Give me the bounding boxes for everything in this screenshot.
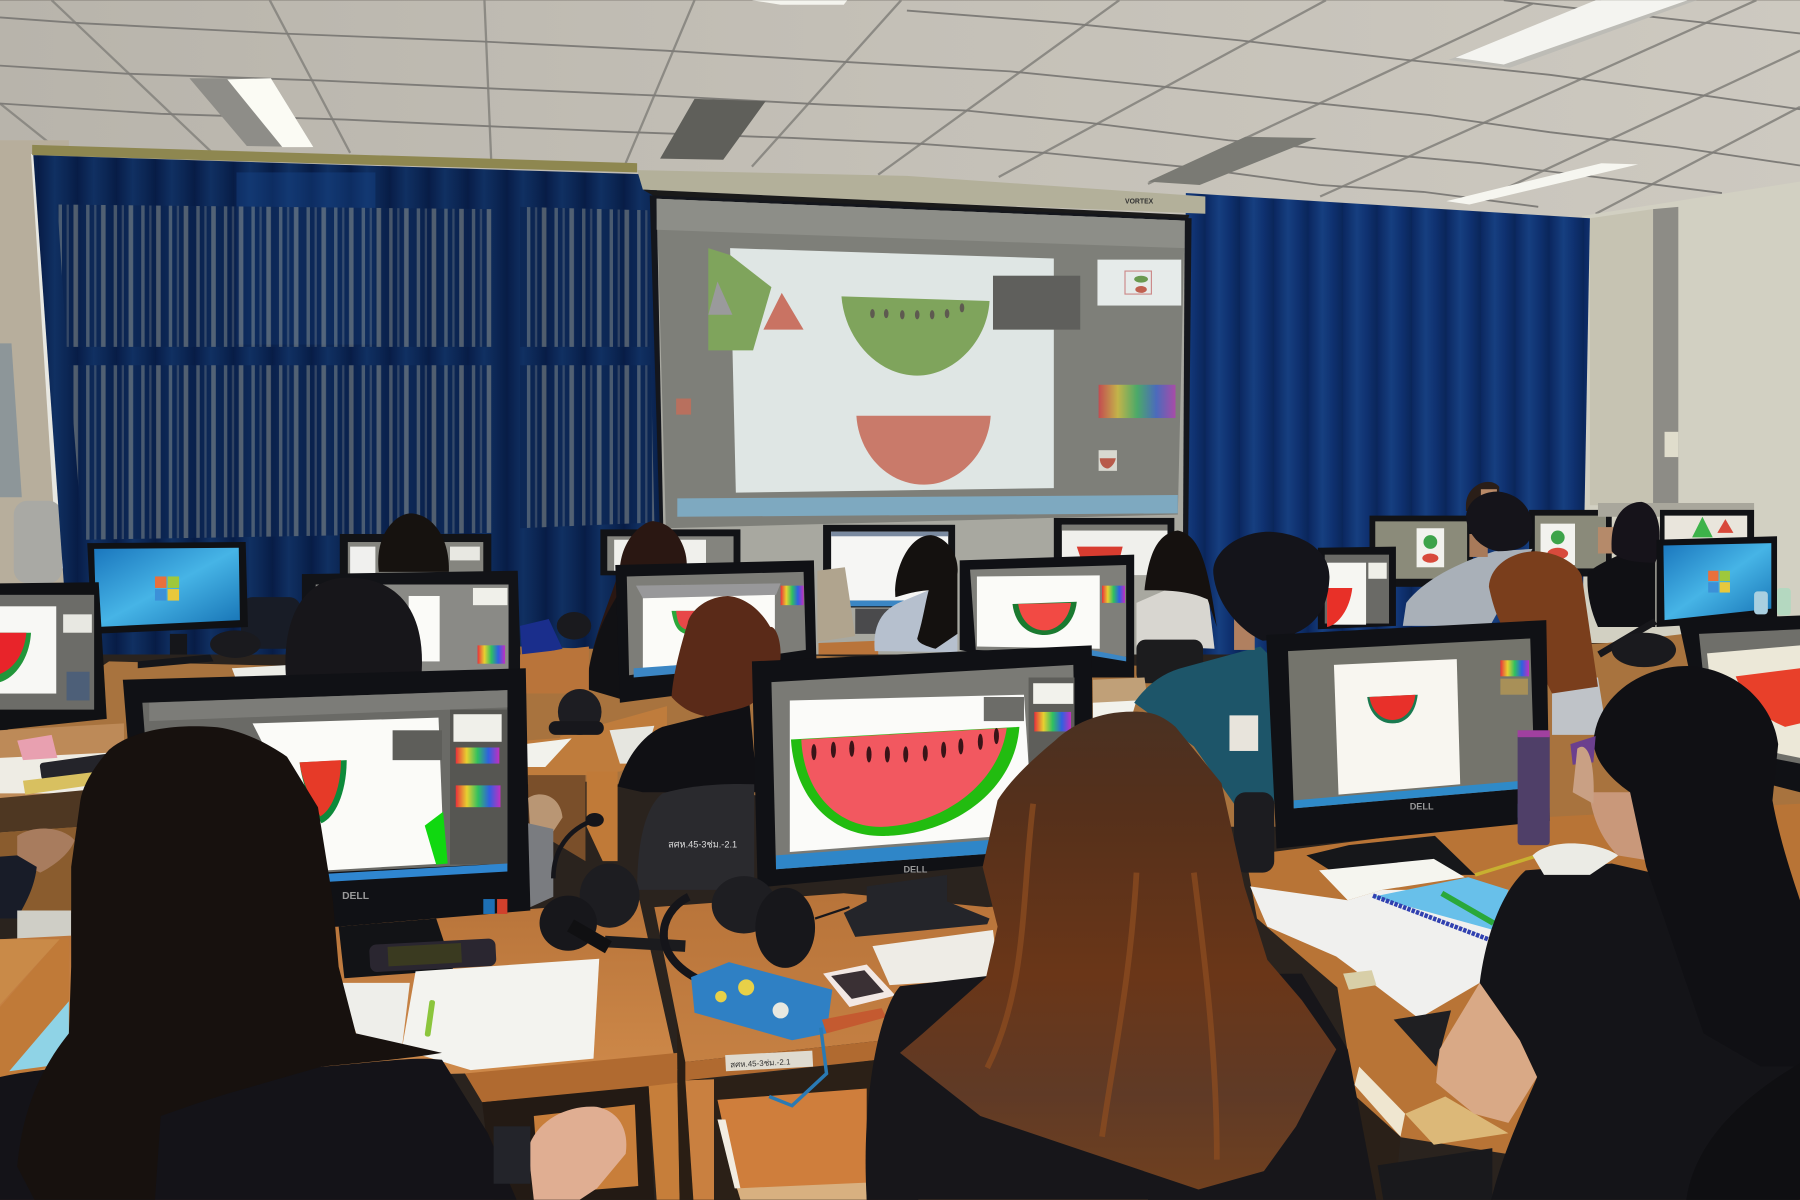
person: man with black hair and teal shirt — [1134, 532, 1329, 804]
right wall and pillar — [1582, 182, 1800, 643]
panels — [984, 697, 1024, 721]
headset: middle — [549, 689, 604, 735]
hand and mic by left monitor — [528, 794, 604, 907]
back row monitors — [87, 503, 1754, 677]
headphones: left pair — [540, 863, 685, 951]
monitor: back row 7 — [1660, 510, 1754, 544]
person: woman with brown hair and black jacket — [618, 596, 781, 792]
projection screen — [650, 195, 1192, 655]
stand — [1306, 836, 1475, 875]
red triangle — [763, 293, 804, 330]
chair beside lace-shirt woman — [1136, 640, 1203, 683]
small items by pouch — [822, 1008, 886, 1033]
projector screen housing: VORTEX — [1125, 198, 1154, 205]
headphones: right pair — [664, 876, 849, 983]
neck — [1589, 792, 1653, 861]
phone on left desk — [369, 938, 497, 972]
teal sheet at left — [9, 1001, 69, 1071]
canvas — [730, 248, 1054, 493]
monitor: mid row center left — [615, 560, 817, 703]
water bottles — [1754, 588, 1791, 615]
taskbar — [327, 863, 507, 882]
left curtain — [33, 155, 664, 655]
right curtain — [1182, 193, 1590, 655]
headset on right desk — [1599, 621, 1676, 667]
hair — [1594, 666, 1800, 1067]
person: man in grey shirt — [1403, 492, 1533, 626]
monitor: large center: DELL — [903, 865, 928, 875]
monitor: large center — [752, 645, 1094, 937]
clothing — [866, 974, 1376, 1200]
floor — [17, 911, 71, 939]
monitor: back row 1 — [340, 534, 491, 581]
dark chair beside teal shirt — [1234, 792, 1274, 873]
swatches — [1099, 385, 1176, 418]
person: back row woman center — [587, 521, 687, 700]
middle desks: left of jacket — [525, 706, 667, 861]
tablet — [610, 726, 654, 764]
float panel — [393, 730, 442, 760]
yellow pen — [1475, 855, 1538, 875]
watermelon slice — [300, 760, 347, 823]
printer behind — [1598, 503, 1754, 517]
sheer window panels — [57, 205, 491, 347]
white smartphone — [823, 964, 895, 1007]
glasses — [1570, 736, 1596, 765]
bag and headset at mid desk — [520, 612, 591, 694]
monitor: large right — [1266, 620, 1550, 875]
ceiling lights and vents — [189, 0, 1697, 205]
cheek — [1573, 747, 1594, 804]
gap between desks — [675, 907, 714, 1200]
desk label: สศห.45-3ช่ม.-2.1 — [730, 1057, 791, 1070]
monitor: right mid — [1318, 547, 1396, 629]
fan — [14, 501, 62, 583]
monitor: large right: DELL — [1410, 802, 1434, 812]
stand — [339, 919, 453, 978]
papers and notebook on right desk — [1250, 855, 1538, 1018]
papers on center desk — [872, 930, 999, 985]
person: auburn haired woman in pale top — [1489, 551, 1607, 735]
person: woman in lace shirt — [1136, 531, 1217, 649]
desk mess near teal shirt — [1093, 677, 1148, 723]
person: foreground center woman — [866, 712, 1376, 1200]
monitor: back row 6 — [1529, 510, 1612, 576]
chair behind blue monitor — [241, 597, 301, 649]
monitor: back row 5 — [1370, 516, 1473, 587]
hand — [17, 829, 75, 873]
stand — [844, 875, 990, 937]
monitor: blue desktop right — [1657, 536, 1777, 627]
foreground desk: center — [654, 893, 1148, 1200]
beige bag — [817, 567, 855, 642]
headset: left rear — [210, 630, 261, 658]
fill swatch — [676, 399, 691, 415]
monitor: back row 4 — [1054, 518, 1174, 575]
monitor: far left — [0, 582, 107, 730]
arm — [1436, 983, 1537, 1123]
clothing — [0, 1059, 517, 1200]
person: foreground left woman — [0, 726, 626, 1200]
back row desks — [0, 620, 1800, 827]
monitor: far right — [1678, 615, 1800, 792]
hand — [528, 1107, 626, 1200]
white cloth — [1533, 843, 1619, 875]
person: woman in black lace at right — [1587, 502, 1660, 627]
curtain rail — [32, 145, 637, 172]
projector screen housing — [637, 170, 1205, 223]
monitor: blue desktop left — [87, 542, 248, 668]
left desk surface with phone and items — [0, 723, 126, 939]
person: back row woman left — [378, 513, 449, 572]
desk label — [725, 1051, 813, 1071]
keyboard and desk edge right — [1343, 1010, 1508, 1200]
watermelon — [791, 727, 1019, 836]
paper — [525, 738, 572, 767]
label below notebook — [1343, 970, 1376, 990]
green polygon shape — [708, 248, 771, 350]
desk under bag — [818, 641, 878, 655]
paper: left rear — [232, 665, 290, 677]
strands — [987, 804, 1217, 1160]
lanyard — [769, 1028, 827, 1106]
office chair: สศห.45-3ช่ม.-2.1 — [668, 839, 737, 849]
taskbar — [677, 495, 1178, 517]
red slice — [856, 416, 991, 485]
monitor: mid row left — [302, 571, 521, 680]
right panel — [450, 710, 507, 865]
green slice — [841, 296, 990, 376]
office chair — [637, 784, 754, 890]
monitor: back row 2 — [600, 529, 740, 575]
person: man with black hair, mid left — [285, 578, 422, 677]
monitor: back row 3 — [823, 525, 955, 634]
foreground desk: left — [0, 900, 680, 1200]
keyboard — [494, 1126, 530, 1184]
person: foreground right woman — [1436, 666, 1800, 1200]
office chair foreground right — [1686, 1063, 1800, 1200]
monitor: large left: DELL — [342, 891, 369, 902]
ceiling — [0, 0, 1800, 230]
left wall and whiteboard — [0, 140, 69, 622]
hair — [900, 712, 1336, 1189]
foreground desk: right — [1246, 804, 1800, 1200]
paper sheets on left desk — [339, 959, 599, 1070]
blue notebook — [1373, 877, 1508, 930]
jacket — [0, 855, 37, 919]
person: woman in pale shirt — [874, 535, 958, 652]
floating panel — [993, 276, 1080, 330]
monitor: mid row center right — [960, 555, 1134, 677]
person: instructor at back — [1466, 482, 1499, 511]
hair — [17, 726, 442, 1200]
monitor: large left — [123, 668, 530, 978]
navigator — [1097, 260, 1181, 306]
clothing — [1480, 863, 1800, 1200]
water bottle — [1518, 730, 1550, 845]
pencil pouch — [691, 962, 832, 1040]
